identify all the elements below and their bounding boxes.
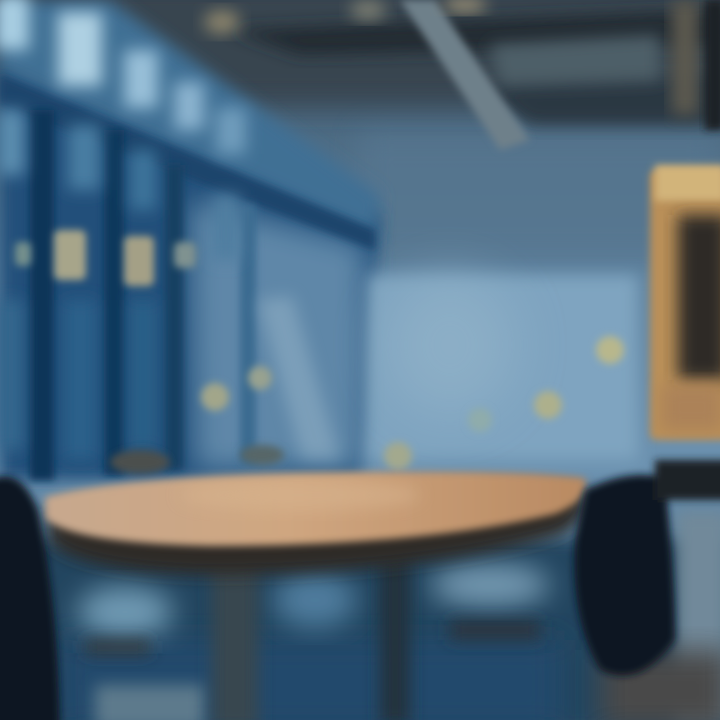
diagonal glass reflection [258,296,340,460]
table legs [85,555,540,720]
window columns [30,110,256,480]
window panes lower row [0,110,240,460]
panel highlight [385,275,515,415]
dark chair right [574,460,720,676]
window panes upper row [0,0,246,154]
lower floor area [0,510,720,720]
window wall on the left [0,0,380,480]
wooden frame on the right [650,165,720,440]
light wall panel [368,275,638,460]
ceiling with beams [100,0,720,150]
objects on table [110,445,284,474]
yellow sticky-note dots [201,336,624,470]
warm lights on glass [15,230,196,286]
dark chair left [0,476,60,720]
table top [45,472,586,575]
